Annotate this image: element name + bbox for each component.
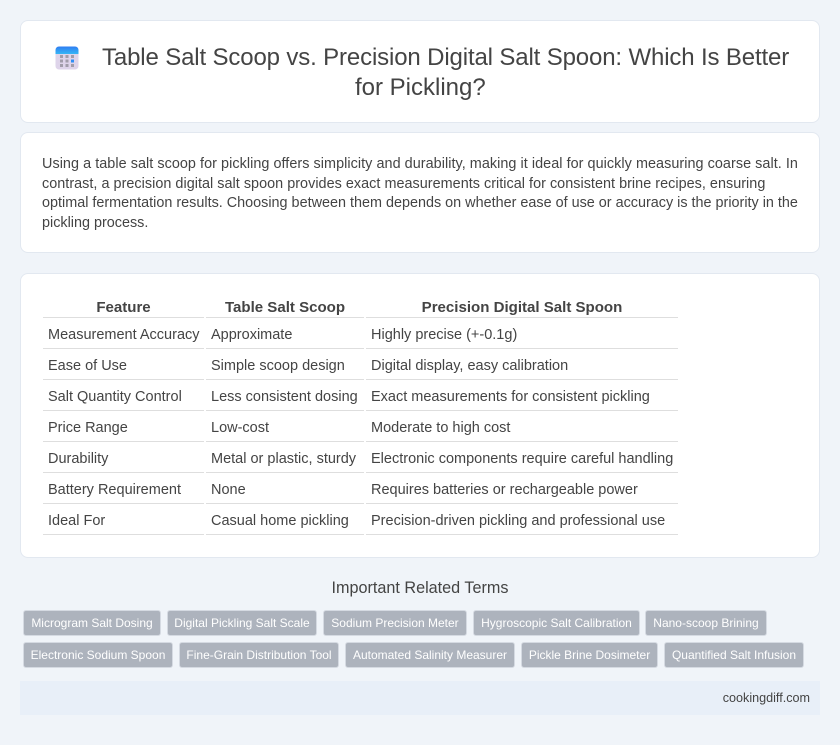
comparison table	[43, 299, 678, 535]
intro text: optimal fermentation results. Choosing between them depends on whether ease of use or accuracy is the priority in the	[42, 195, 798, 211]
comparison table: Highly precise (+-0.1g)	[371, 327, 517, 343]
tags: related terms: Electronic Sodium Spoon	[31, 648, 165, 662]
tags: related terms: Fine-Grain Distribution Tool	[186, 648, 332, 662]
title: for Pickling?	[355, 74, 486, 101]
intro text	[42, 156, 798, 231]
comparison table: Feature	[96, 299, 151, 316]
tags: related terms: Hygroscopic Salt Calibration	[481, 616, 632, 630]
heading: related terms: Important Related Terms	[332, 579, 508, 597]
comparison table: Precision-driven pickling and professional use	[371, 513, 665, 529]
comparison table: Metal or plastic, sturdy	[211, 451, 356, 467]
title	[102, 44, 789, 101]
comparison table: Low-cost	[211, 420, 269, 436]
comparison table: Digital display, easy calibration	[371, 358, 568, 374]
icon: calendar	[56, 46, 78, 70]
comparison table: Salt Quantity Control	[48, 389, 182, 405]
tags: related terms: Nano-scoop Brining	[653, 616, 759, 630]
comparison table: Battery Requirement	[48, 482, 181, 498]
comparison table: Table Salt Scoop	[225, 299, 345, 316]
comparison table: Moderate to high cost	[371, 420, 510, 436]
footer: source: cookingdiff.com	[723, 691, 810, 705]
comparison table: Approximate	[211, 327, 292, 343]
tags: related terms: Microgram Salt Dosing	[31, 616, 153, 630]
comparison table: Exact measurements for consistent pickling	[371, 389, 650, 405]
tags: related terms: Digital Pickling Salt Scale	[174, 616, 310, 630]
comparison table: Ease of Use	[48, 358, 127, 374]
panel: comparison table card	[20, 273, 820, 558]
comparison table: None	[211, 482, 246, 498]
intro text: pickling process.	[42, 215, 148, 231]
tags: related terms: Pickle Brine Dosimeter	[529, 648, 650, 662]
comparison table: Requires batteries or rechargeable power	[371, 482, 638, 498]
comparison table: Price Range	[48, 420, 128, 436]
intro text: contrast, a precision digital salt spoon provides exact measurements critical for consistent brine recipes, ensuring	[42, 176, 765, 192]
comparison table: Electronic components require careful handling	[371, 451, 673, 467]
comparison table: Casual home pickling	[211, 513, 349, 529]
tags: related terms: Quantified Salt Infusion	[672, 648, 796, 662]
panel: title card	[20, 20, 820, 123]
tags: related terms: Automated Salinity Measurer	[353, 648, 507, 662]
comparison table: Precision Digital Salt Spoon	[422, 299, 622, 316]
title: Table Salt Scoop vs. Precision Digital Salt Spoon: Which Is Better	[102, 44, 789, 71]
footer bar	[20, 681, 820, 715]
comparison table: Less consistent dosing	[211, 389, 358, 405]
comparison table: Simple scoop design	[211, 358, 345, 374]
tags: related terms: Sodium Precision Meter	[331, 616, 459, 630]
comparison table: Ideal For	[48, 513, 105, 529]
intro text: Using a table salt scoop for pickling offers simplicity and durability, making it ideal for quickly measuring coarse salt. In	[42, 156, 798, 172]
comparison table: Durability	[48, 451, 108, 467]
comparison table: Measurement Accuracy	[48, 327, 200, 343]
panel: intro card	[20, 132, 820, 253]
